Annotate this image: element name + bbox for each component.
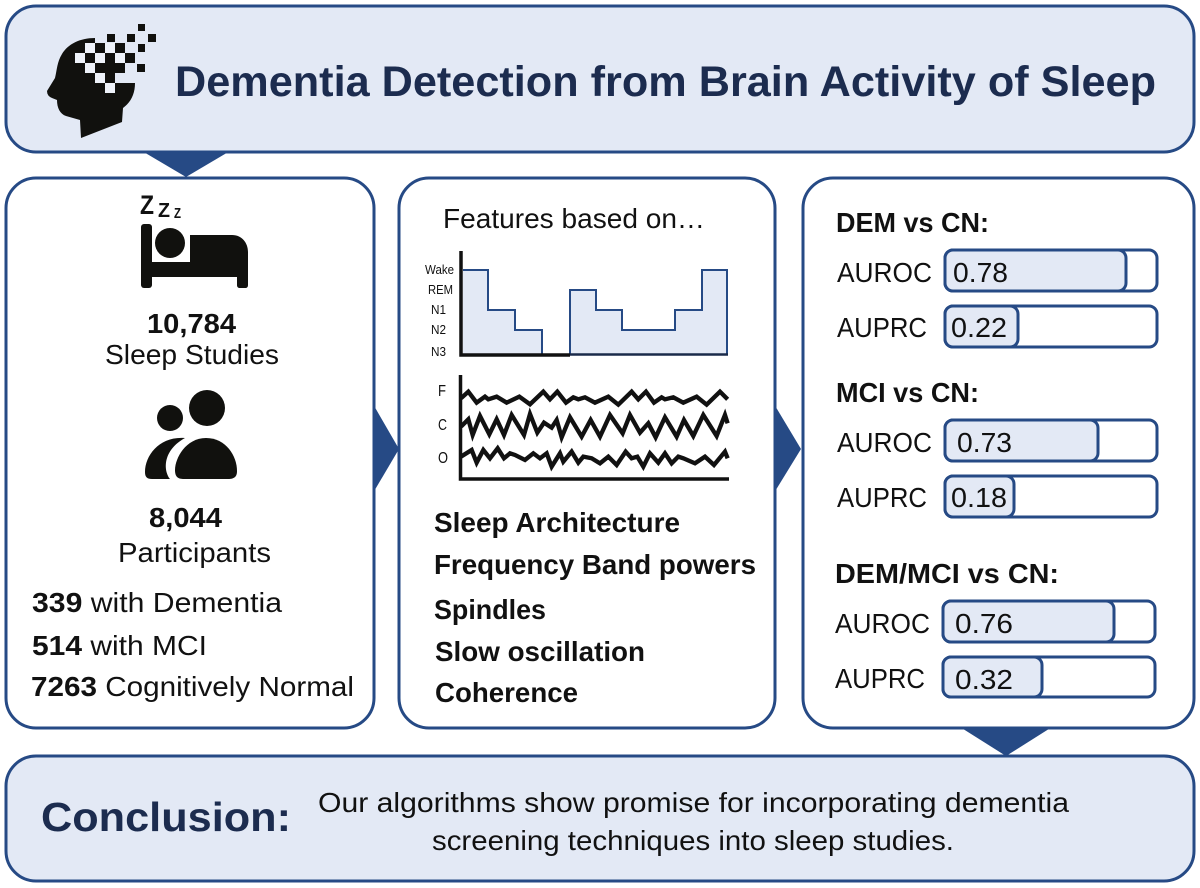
results: MCI vs CN: MCI vs CN:	[836, 377, 979, 408]
feature list: Slow oscillation	[435, 636, 645, 667]
chart: hypnogram: N3	[431, 344, 446, 359]
results: MCI vs CN	[836, 377, 1157, 517]
panel: features	[399, 178, 775, 728]
results: DEM/MCI vs CN: 0.32	[955, 664, 1013, 695]
chart: hypnogram	[425, 251, 728, 359]
feature list: Sleep Architecture	[434, 507, 680, 538]
arrow: middle panel to right panel	[774, 404, 801, 493]
results: DEM vs CN: AUPRC	[837, 312, 927, 343]
title: Dementia Detection from Brain Activity of Sleep	[175, 59, 1156, 106]
stat: participants	[118, 502, 271, 568]
icon: sleeping person in bed	[140, 190, 248, 288]
results: DEM vs CN	[836, 207, 1157, 347]
panel: conclusion	[6, 756, 1194, 881]
results: MCI vs CN: AUPRC	[837, 482, 927, 513]
icon: dementia head	[47, 24, 156, 138]
chart: hypnogram: Wake	[425, 262, 454, 277]
results: DEM vs CN: 0.22	[951, 312, 1007, 343]
results: MCI vs CN: 0.73	[957, 427, 1012, 458]
chart: EEG traces: O	[438, 450, 448, 467]
results: DEM/MCI vs CN	[835, 558, 1155, 697]
feature list: Frequency Band powers	[434, 549, 756, 580]
chart: EEG traces: F	[438, 383, 446, 400]
chart: hypnogram: N2	[431, 322, 446, 337]
arrow: left panel to middle panel	[373, 404, 399, 493]
icon: participants	[145, 390, 237, 479]
feature list	[434, 507, 756, 708]
results: MCI vs CN: AUROC	[837, 427, 932, 458]
results: DEM/MCI vs CN: 0.76	[955, 608, 1013, 639]
feature list: Coherence	[435, 677, 578, 708]
features heading: Features based on…	[443, 203, 705, 234]
panel: study population	[6, 178, 374, 728]
icon: sleeping person in bed: Z	[174, 206, 181, 222]
chart: hypnogram: N1	[431, 302, 446, 317]
chart: hypnogram: REM	[428, 282, 453, 297]
results: MCI vs CN: 0.18	[951, 482, 1007, 513]
conclusion heading: Conclusion:	[41, 794, 291, 840]
participant breakdown: 339 with Dementia	[32, 587, 282, 618]
feature list: Spindles	[434, 594, 546, 625]
conclusion text	[318, 787, 1069, 856]
results: DEM vs CN: 0.78	[953, 257, 1008, 288]
stat: sleep studies: Sleep Studies	[105, 339, 279, 370]
arrow: right panel to conclusion	[960, 727, 1052, 756]
conclusion text: Our algorithms show promise for incorporating dementia	[318, 787, 1069, 818]
results: DEM/MCI vs CN: AUPRC	[835, 663, 925, 694]
conclusion text: screening techniques into sleep studies.	[432, 825, 954, 856]
participant breakdown: 7263 Cognitively Normal	[31, 671, 354, 702]
stat: sleep studies: 10,784	[147, 308, 236, 339]
stat: sleep studies	[105, 308, 279, 370]
results: DEM/MCI vs CN: DEM/MCI vs CN:	[835, 558, 1059, 589]
participant breakdown: 514 with MCI	[32, 630, 207, 661]
chart: EEG traces	[438, 375, 729, 479]
results: DEM vs CN: AUROC	[837, 257, 932, 288]
icon: sleeping person in bed: Z	[140, 190, 154, 220]
panel: results	[803, 178, 1194, 728]
arrow: header to left panel	[142, 151, 230, 177]
results: DEM vs CN: DEM vs CN:	[836, 207, 989, 238]
results: DEM/MCI vs CN: AUROC	[835, 608, 930, 639]
stat: participants: 8,044	[149, 502, 222, 533]
chart: EEG traces: C	[438, 417, 447, 434]
participant breakdown	[31, 587, 354, 702]
icon: sleeping person in bed: Z	[158, 200, 170, 222]
stat: participants: Participants	[118, 537, 271, 568]
panel: title banner	[6, 6, 1194, 152]
